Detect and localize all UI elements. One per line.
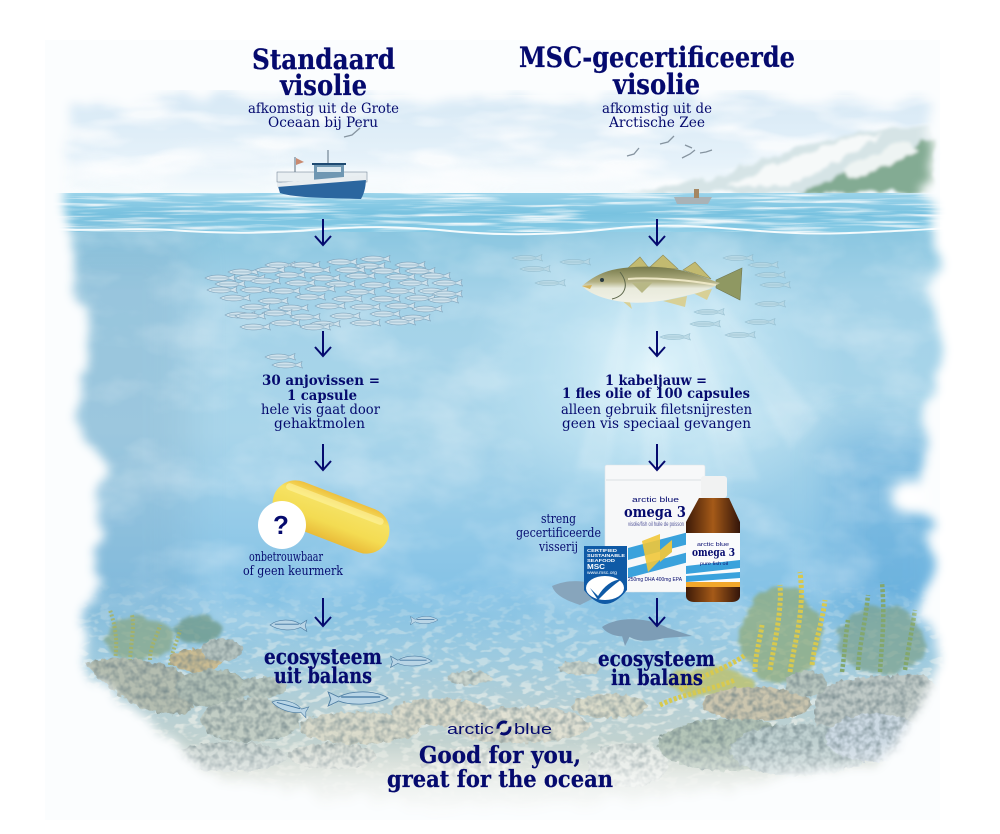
verdict left: uit balans bbox=[274, 663, 372, 688]
verdict right bbox=[598, 646, 715, 690]
hill on the horizon bbox=[618, 124, 935, 193]
pouch dose: 250mg DHA 400mg EPA bbox=[628, 577, 682, 583]
brand logo bbox=[447, 721, 552, 738]
subheading right bbox=[602, 101, 712, 131]
waterline bbox=[50, 226, 950, 234]
brand logo: arctic bbox=[447, 721, 495, 738]
arrows bbox=[315, 219, 665, 626]
MSC text: SEAFOOD bbox=[587, 558, 616, 563]
text: kabeljauw: alleen gebruik filetsnijresten bbox=[561, 402, 752, 418]
anchovy school bbox=[205, 256, 462, 368]
MSC text: MSC bbox=[587, 564, 605, 571]
subheading right: afkomstig uit de bbox=[602, 101, 712, 117]
text: anjovissen: 1 capsule bbox=[287, 388, 357, 404]
pouch title: omega 3 bbox=[624, 503, 686, 521]
subheading left: afkomstig uit de Grote bbox=[248, 101, 399, 117]
fishing boat bbox=[277, 150, 367, 199]
text: streng gecertificeerde visserij: gecertificeerde bbox=[516, 526, 601, 541]
question badge: ? bbox=[273, 510, 289, 540]
pouch logo: arctic blue bbox=[632, 497, 679, 504]
text: streng gecertificeerde visserij: streng bbox=[541, 512, 576, 527]
text: anjovissen: hele vis gaat door bbox=[261, 402, 380, 418]
arrow right lower bbox=[649, 598, 665, 626]
MSC text bbox=[587, 548, 625, 575]
bottle logo: arctic blue bbox=[697, 542, 729, 548]
white splash right bbox=[890, 481, 926, 513]
text: kabeljauw bbox=[561, 373, 752, 432]
text: streng gecertificeerde visserij: visserij bbox=[538, 540, 578, 555]
pouch subtitle: visolie/fish oil huile de poisson bbox=[628, 522, 684, 528]
heading right bbox=[519, 41, 795, 101]
slogan bbox=[387, 742, 613, 793]
heading left: visolie bbox=[279, 69, 367, 102]
text: kabeljauw: 1 fles olie of 100 capsules bbox=[562, 386, 750, 402]
MSC text: www.msc.org bbox=[587, 570, 618, 575]
bottom fade bbox=[187, 746, 883, 816]
bird flock bbox=[344, 128, 712, 158]
MSC text: SUSTAINABLE bbox=[587, 553, 625, 558]
text: onbetrouwbaar: onbetrouwbaar bbox=[249, 550, 324, 565]
slogan: great for the ocean bbox=[387, 766, 613, 793]
MSC label bbox=[584, 546, 627, 604]
text: anjovissen bbox=[261, 373, 380, 432]
heading right: visolie bbox=[612, 68, 700, 101]
subheading left: Oceaan bij Peru bbox=[268, 115, 378, 131]
verdict left bbox=[264, 644, 382, 688]
underwater bbox=[62, 222, 949, 658]
smaller fish around the cod bbox=[512, 254, 790, 340]
arrow above products bbox=[649, 444, 665, 470]
question badge bbox=[258, 501, 306, 549]
rocks right bbox=[658, 671, 940, 776]
MSC text: CERTIFIED bbox=[587, 548, 618, 553]
text: kabeljauw: 1 kabeljauw = bbox=[605, 373, 707, 389]
seaweed right bbox=[660, 572, 926, 705]
verdict right: ecosysteem bbox=[598, 646, 715, 671]
brand logo: blue bbox=[514, 721, 552, 738]
verdict right: in balans bbox=[611, 665, 703, 690]
bottle subtitle: pure fish oil bbox=[700, 561, 728, 566]
text: anjovissen: gehaktmolen bbox=[274, 416, 365, 432]
text: onbetrouwbaar: of geen keurmerk bbox=[243, 564, 343, 579]
subheading left bbox=[248, 101, 399, 131]
text: kabeljauw: geen vis speciaal gevangen bbox=[562, 416, 751, 432]
rowing boat bbox=[674, 189, 712, 204]
text: streng gecertificeerde visserij bbox=[516, 512, 601, 555]
bottle bbox=[686, 476, 740, 602]
seabed bbox=[79, 588, 943, 802]
sky bbox=[64, 90, 934, 188]
text: onbetrouwbaar bbox=[243, 550, 343, 579]
pouch bbox=[605, 465, 705, 592]
cod bbox=[582, 255, 742, 309]
bottle title: omega 3 bbox=[692, 546, 735, 559]
rocks and sand middle bbox=[300, 661, 668, 787]
dolphin bbox=[602, 619, 692, 646]
slogan: Good for you, bbox=[419, 742, 581, 769]
rocks left bbox=[85, 639, 376, 772]
text: anjovissen: 30 anjovissen = bbox=[262, 373, 380, 389]
heading left: Standaard bbox=[252, 43, 395, 76]
sea surface bbox=[57, 193, 942, 232]
heading right: MSC-gecertificeerde bbox=[519, 41, 795, 74]
seal bbox=[552, 581, 610, 605]
seaweed left bbox=[106, 610, 222, 665]
heading left bbox=[252, 43, 395, 102]
subheading right: Arctische Zee bbox=[608, 115, 705, 131]
swimming fish on seabed bbox=[270, 616, 438, 718]
verdict left: ecosysteem bbox=[264, 644, 382, 669]
capsule bbox=[266, 474, 396, 560]
